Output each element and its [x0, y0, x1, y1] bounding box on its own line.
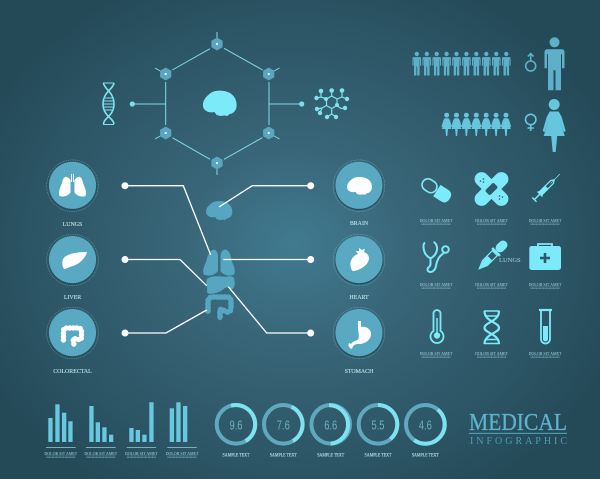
captions: DOLOR SIT AMET: [475, 351, 508, 356]
organ: brain: [206, 201, 232, 220]
title: MEDICAL: [469, 410, 567, 436]
central organs figure: [203, 201, 235, 318]
connector dots: [122, 182, 314, 336]
panel: heart: [333, 234, 385, 301]
hexagon nodes: [160, 38, 274, 170]
captions: [420, 218, 562, 358]
male population row: [412, 52, 511, 76]
gauge 9.6: SAMPLE TEXT: [222, 454, 250, 459]
bar chart 3: DOLOR SIT AMET: [125, 451, 158, 456]
white connector lines: [125, 186, 311, 333]
icon: female symbol: [526, 114, 536, 131]
icon: molecule right: [315, 89, 349, 119]
bar chart 4: DOLOR SIT AMET: [166, 451, 199, 456]
icon: large woman: [543, 99, 566, 152]
connector end dots: [130, 101, 304, 107]
icon: stomach: [348, 321, 371, 349]
title: [469, 410, 567, 447]
captions: DOLOR SIT AMET: [529, 218, 562, 223]
organ: lungs: [203, 250, 235, 276]
icon: bandage: [472, 169, 511, 209]
captions: DOLOR SIT AMET: [529, 282, 562, 287]
gauge 5.5: 5.5: [372, 418, 385, 432]
organ callouts: [47, 160, 385, 375]
panel: colorectal: [47, 307, 98, 375]
captions: DOLOR SIT AMET: [529, 351, 562, 356]
gauge 5.5: SAMPLE TEXT: [364, 454, 392, 459]
panel: liver: [47, 234, 98, 301]
panel: lungs: [47, 160, 98, 228]
gauge 7.6: [264, 405, 303, 459]
gauge 7.6: 7.6: [277, 418, 290, 432]
icon: thermometer: [431, 310, 444, 343]
gauge 6.6: [311, 405, 350, 459]
icon: first aid kit: [529, 244, 561, 270]
label: COLORECTAL: [53, 369, 92, 375]
bar chart 2: DOLOR SIT AMET: [84, 451, 118, 456]
icon: colon: [64, 328, 82, 345]
icon: brain: [347, 177, 372, 195]
icon: test tube: [539, 310, 552, 344]
gauge 5.5: [359, 405, 397, 459]
icon: male symbol: [526, 54, 536, 71]
icon: heart: [350, 248, 369, 271]
icon: liver: [62, 252, 87, 269]
bar chart 1: [44, 404, 78, 458]
icon: large man: [544, 37, 564, 90]
icon: syringe: [532, 172, 562, 202]
label: STOMACH: [345, 369, 374, 375]
icon: pill: [419, 176, 453, 205]
gauge 9.6: 9.6: [230, 418, 243, 432]
bar chart 1: DOLOR SIT AMET: [44, 451, 78, 456]
gauge 7.6: SAMPLE TEXT: [270, 454, 297, 459]
icon: central brain: [203, 91, 237, 116]
panel: stomach: [333, 307, 385, 375]
ring gauges: [217, 405, 445, 459]
label: BRAIN: [350, 221, 369, 227]
icon: lungs: [59, 174, 86, 197]
bar chart 2: [84, 406, 118, 458]
gauge 4.6: SAMPLE TEXT: [412, 454, 439, 459]
organ: liver and stomach: [206, 276, 235, 294]
hexagon network diagram: [103, 32, 349, 175]
captions: DOLOR SIT AMET: [475, 218, 508, 223]
medical icon grid: [419, 169, 562, 358]
label: HEART: [349, 295, 369, 301]
icon: stethoscope: [423, 242, 449, 272]
stray label on dropper: LUNGS: [499, 257, 521, 264]
title: INFOGRAPHIC: [470, 436, 567, 447]
icon: dropper: [475, 238, 510, 273]
gauge 4.6: 4.6: [419, 418, 432, 432]
gauge 6.6: 6.6: [324, 418, 337, 432]
hexagon lines: [132, 32, 302, 175]
panel: brain: [333, 160, 385, 227]
icon: dna left: [103, 83, 114, 124]
captions: DOLOR SIT AMET: [420, 282, 453, 287]
organ: intestine: [208, 297, 231, 318]
bar chart 3: [125, 402, 158, 458]
captions: DOLOR SIT AMET: [420, 218, 453, 223]
gauge 9.6: [217, 405, 255, 459]
label: LUNGS: [63, 222, 82, 228]
bar charts: [44, 402, 199, 458]
bar chart 4: [166, 402, 199, 458]
gauge 4.6: [406, 405, 445, 459]
gauge 6.6: SAMPLE TEXT: [317, 454, 344, 459]
female population row: [442, 113, 511, 136]
label: LIVER: [64, 295, 81, 301]
icon: dna: [484, 311, 500, 344]
captions: DOLOR SIT AMET: [475, 282, 508, 287]
captions: DOLOR SIT AMET: [420, 351, 453, 356]
